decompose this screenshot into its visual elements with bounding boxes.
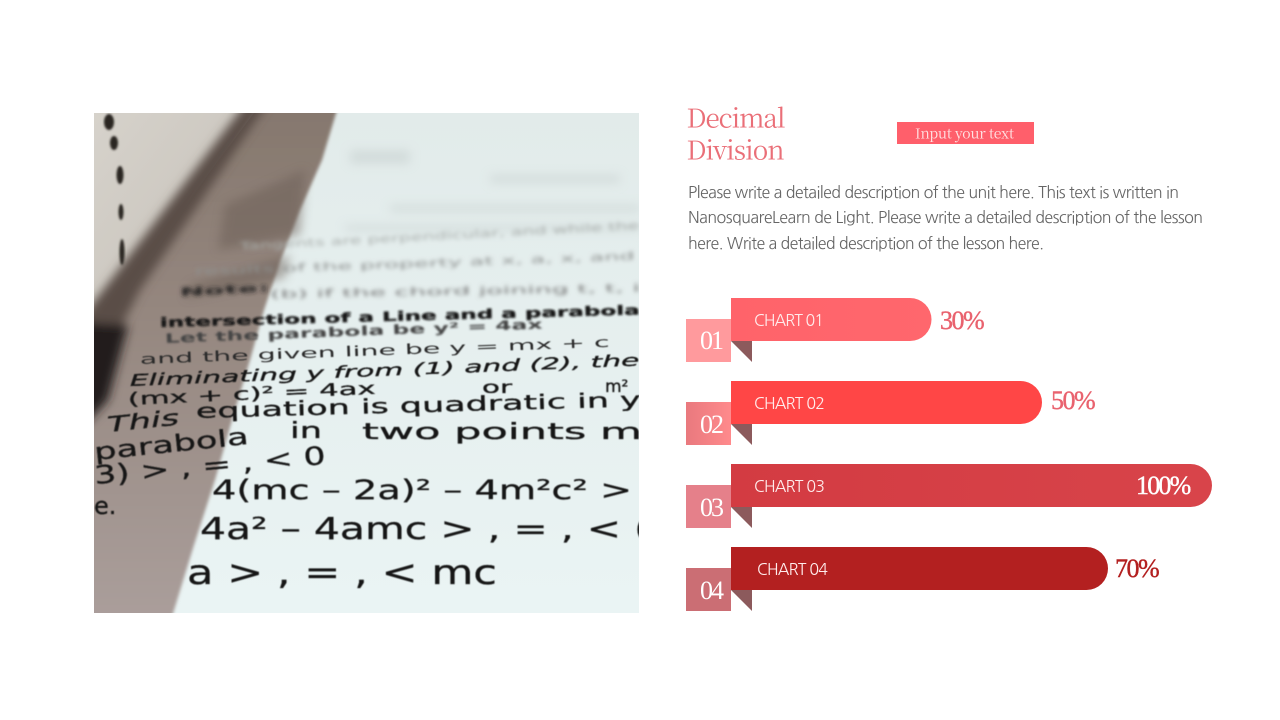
- chart row 02: 02: [700, 410, 723, 439]
- chart row 01: CHART 01: [754, 313, 824, 329]
- photo: open math textbook: Note:: [179, 281, 270, 299]
- photo: open math textbook: (mx + c)² = 4ax: [127, 379, 376, 410]
- photo: open math textbook: 4(mc – 2a)² – 4m²c² >: [212, 475, 632, 506]
- photo: open math textbook: parabola: [93, 424, 250, 466]
- chart row 03: [686, 464, 1212, 528]
- chart row 03: 100%: [1136, 471, 1191, 500]
- tag: input your text: Input your text: [915, 124, 1014, 144]
- photo: open math textbook: (b) if the chord joining t, t, i: [270, 282, 640, 301]
- photo: open math textbook: 3) > , = , < 0: [93, 441, 327, 490]
- photo: open math textbook: intersection of a Line and a parabola: [160, 303, 640, 331]
- photo: open math textbook: 4a² – 4amc > , = , < (: [200, 512, 650, 547]
- chart row 02: [686, 381, 1095, 445]
- photo: open math textbook: e.: [94, 492, 116, 520]
- photo: open math textbook: and the given line be y = mx + c: [140, 335, 610, 368]
- chart row 01: 01: [700, 326, 723, 355]
- chart row 04: 70%: [1115, 554, 1159, 583]
- photo: open math textbook: equation is quadratic in y: [196, 387, 641, 423]
- chart row 02: 50%: [1051, 386, 1095, 415]
- title: [686, 98, 786, 168]
- photo: open math textbook: or: [482, 378, 512, 398]
- title: Decimal: [686, 98, 786, 136]
- chart row 01: [686, 298, 984, 362]
- photo: open math textbook: Let the parabola be y² = 4ax: [165, 317, 544, 347]
- photo: open math textbook: two points m: [362, 420, 642, 445]
- photo: open math textbook: This: [106, 406, 180, 437]
- description text: [688, 185, 1203, 252]
- chart row 04: CHART 04: [757, 562, 828, 578]
- chart row 03: 03: [700, 493, 723, 522]
- chart row 02: CHART 02: [754, 396, 825, 412]
- infographic slide: [94, 106, 1212, 613]
- photo: open math textbook: Eliminating y from (1) and (2), the: [129, 351, 640, 390]
- photo: open math textbook: m²: [605, 377, 628, 397]
- title: Division: [686, 130, 784, 168]
- description text: NanosquareLearn de Light. Please write a detailed description of the lesson: [688, 210, 1203, 226]
- chart row 04: [686, 547, 1159, 611]
- photo: open math textbook: Tangents are perpendicular, and while the: [238, 219, 640, 253]
- description text: here. Write a detailed description of the lesson here.: [688, 236, 1044, 252]
- photo: open math textbook: a > , = , < mc: [187, 553, 497, 593]
- tag: input your text: [897, 122, 1034, 144]
- photo: open math textbook: in: [290, 419, 322, 444]
- chart row 03: CHART 03: [754, 479, 825, 495]
- chart row 04: 04: [700, 576, 724, 605]
- description text: Please write a detailed description of the unit here. This text is written in: [688, 185, 1179, 201]
- chart row 01: 30%: [940, 306, 984, 335]
- photo: open math textbook: [94, 113, 639, 613]
- photo: open math textbook: results of the property at x, a, x, and: [195, 250, 635, 278]
